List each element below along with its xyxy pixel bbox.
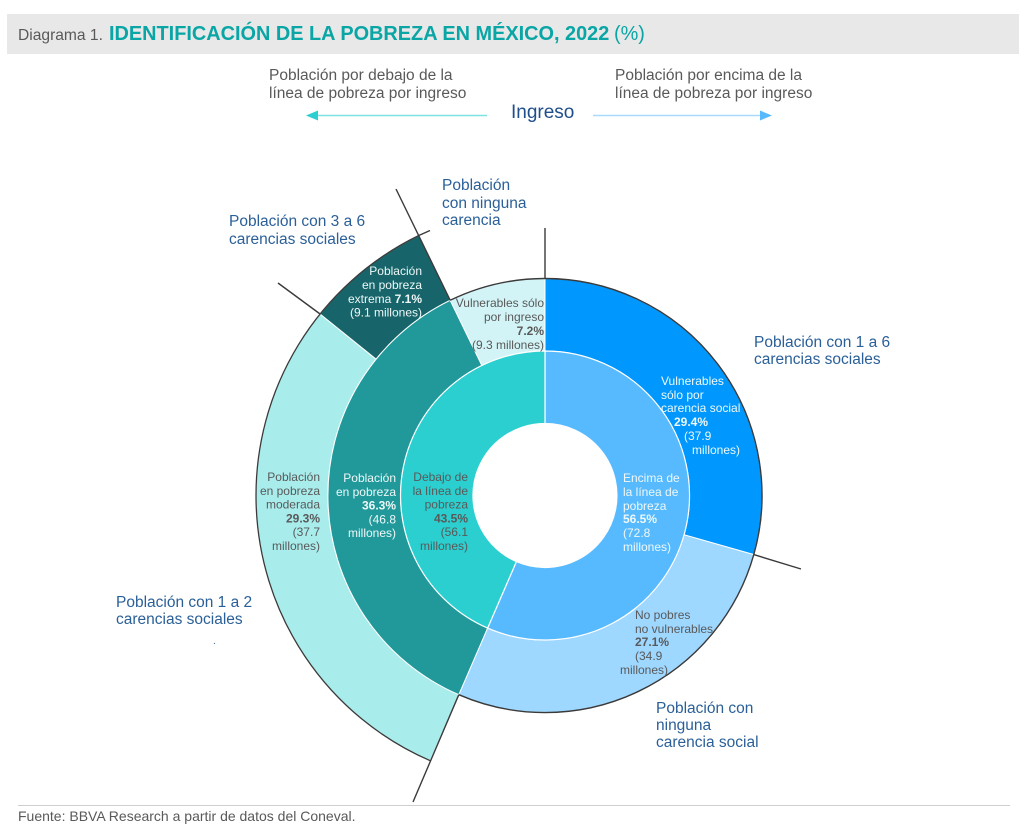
label: population in poverty: millones)	[348, 526, 396, 540]
arrow: left	[306, 110, 487, 120]
callout: 1 to 2 deprivations: Población con 1 a 2	[116, 594, 252, 611]
middle ring: vulnerable by social deprivation	[545, 278, 762, 555]
label: above poverty line: la línea de	[623, 485, 679, 499]
text: above poverty line: Población por encima de la	[615, 67, 802, 84]
label: income: Ingreso	[511, 102, 574, 123]
label: below poverty line: (56.1	[441, 525, 468, 539]
label: moderate poverty: millones)	[272, 539, 320, 553]
label: not poor not vulnerable: 27.1%	[635, 635, 669, 649]
label: below poverty line: pobreza	[425, 498, 468, 512]
label: above poverty line: millones)	[623, 540, 671, 554]
label: moderate poverty: 29.3%	[286, 512, 320, 526]
sunburst chart	[256, 189, 801, 802]
label: extreme poverty: en pobreza	[362, 278, 422, 292]
text: below poverty line: Población por debajo de la	[269, 67, 453, 84]
title: IDENTIFICACIÓN DE LA POBREZA EN MÉXICO, 2022	[109, 21, 615, 45]
callout: 1 to 2 deprivations: .	[213, 636, 216, 647]
label: above poverty line: pobreza	[623, 499, 667, 513]
label: population in poverty: en pobreza	[336, 485, 396, 499]
label: vulnerable by social deprivation: millones)	[692, 443, 740, 457]
label: above poverty line: Encima de	[623, 471, 680, 485]
source footnote: Fuente: BBVA Research a partir de datos del Coneval.	[18, 808, 356, 824]
label: below poverty line: 43.5%	[434, 512, 468, 526]
title: (%)	[614, 23, 645, 45]
label: vulnerable by social deprivation: (37.9	[684, 429, 712, 443]
middle ring: not poor not vulnerable	[459, 535, 754, 713]
label: not poor not vulnerable: No pobres	[635, 608, 690, 622]
label: moderate poverty: moderada	[266, 498, 320, 512]
text: below poverty line: línea de pobreza por ingreso	[269, 85, 466, 102]
label: below poverty line: Debajo de	[413, 470, 468, 484]
callout: no social deprivation: ninguna	[656, 717, 712, 734]
callout: 3 to 6 deprivations: carencias sociales	[229, 231, 356, 248]
label: vulnerable by income: por ingreso	[484, 310, 544, 324]
callout: 1 to 6 deprivations: carencias sociales	[754, 351, 881, 368]
title: Diagrama 1.	[18, 27, 107, 44]
label: vulnerable by social deprivation: sólo por	[661, 388, 704, 402]
label: not poor not vulnerable: millones)	[620, 663, 668, 677]
label: vulnerable by income: (9.3 millones)	[472, 338, 544, 352]
label: not poor not vulnerable: no vulnerables	[635, 622, 713, 636]
label: vulnerable by social deprivation: Vulnerables	[661, 374, 724, 388]
inner ring: below poverty line	[401, 351, 545, 628]
label: not poor not vulnerable: (34.9	[635, 649, 663, 663]
callout: no social deprivation: Población con	[656, 700, 753, 717]
label: vulnerable by social deprivation: carencia social	[661, 401, 740, 415]
inner ring: above poverty line	[488, 351, 690, 640]
label: population in poverty: (46.8	[369, 512, 396, 526]
callout: no social deprivation: carencia social	[656, 734, 759, 751]
label: below poverty line: millones)	[420, 539, 468, 553]
label: population in poverty: 36.3%	[362, 498, 396, 512]
label: vulnerable by income: 7.2%	[517, 324, 544, 338]
callout: no deprivation: carencia	[442, 212, 501, 229]
arrow: right	[593, 110, 772, 120]
label: population in poverty: Población	[343, 471, 396, 485]
callout: 3 to 6 deprivations: Población con 3 a 6	[229, 213, 365, 230]
label: moderate poverty: (37.7	[293, 525, 320, 539]
label: extreme poverty: Población	[369, 264, 422, 278]
label: extreme poverty: extrema 7.1%	[348, 292, 422, 306]
label: above poverty line: (72.8	[623, 526, 651, 540]
header band	[7, 14, 1019, 54]
outer ring: extreme poverty	[320, 236, 450, 359]
middle ring: population in poverty	[328, 300, 488, 695]
middle ring: vulnerable by income	[450, 278, 545, 366]
callout: 1 to 2 deprivations: carencias sociales	[116, 611, 243, 628]
label: moderate poverty: en pobreza	[260, 484, 320, 498]
outer ring: moderate poverty	[256, 314, 459, 761]
callout: no deprivation: Población	[442, 177, 510, 194]
text: above poverty line: línea de pobreza por ingreso	[615, 85, 812, 102]
label: vulnerable by social deprivation: 29.4%	[674, 415, 708, 429]
label: extreme poverty: (9.1 millones)	[350, 306, 422, 320]
label: below poverty line: la línea de	[413, 484, 468, 498]
label: moderate poverty: Población	[267, 470, 320, 484]
income axis header	[269, 67, 812, 123]
callout: 1 to 6 deprivations: Población con 1 a 6	[754, 334, 890, 351]
chart outlines and tick lines	[256, 189, 801, 802]
label: above poverty line: 56.5%	[623, 512, 657, 526]
callout: no deprivation: con ninguna	[442, 195, 527, 212]
label: vulnerable by income: Vulnerables sólo	[456, 296, 544, 310]
